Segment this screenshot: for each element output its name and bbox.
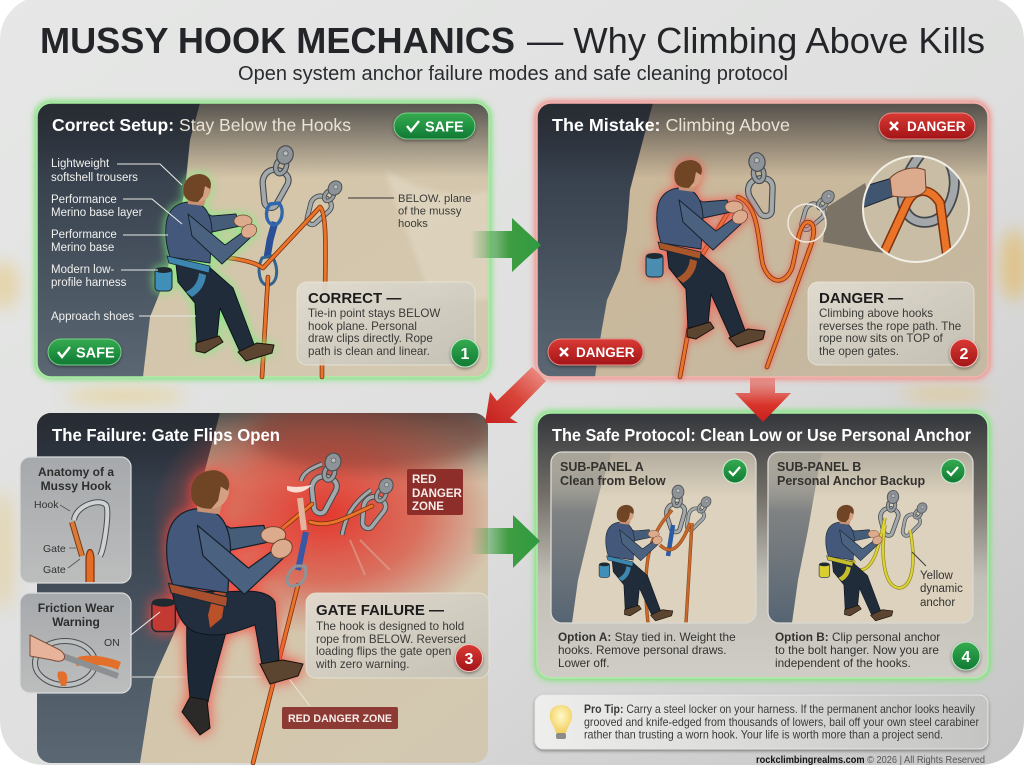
sub-panel b: anchor	[920, 597, 955, 609]
caption: option b: to the bolt hanger. Now you are	[775, 643, 939, 657]
callout: gate failure	[306, 593, 489, 678]
inset: anatomy of a mussy hook: Gate	[43, 564, 66, 576]
sub-panel b: SUB-PANEL B	[777, 460, 861, 474]
gear labels: Approach shoes	[51, 311, 134, 323]
sub-panel a: SUB-PANEL A	[560, 460, 644, 474]
callout: danger: the open gates.	[819, 345, 899, 358]
inset: friction wear warning: ON	[104, 637, 120, 649]
callout: correct: draw clips directly. Rope	[308, 332, 433, 345]
gear labels: Performance	[51, 229, 117, 241]
panel 3: the failure	[20, 395, 500, 763]
arrow: panel 2 to panel 3	[485, 367, 546, 423]
gear labels: softshell trousers	[51, 172, 138, 184]
label: red danger zone bottom: RED DANGER ZONE	[288, 713, 392, 725]
magnifier beam	[823, 183, 883, 253]
title: — Why Climbing Above Kills	[527, 20, 985, 61]
gear labels: Lightweight	[51, 158, 110, 170]
callout: gate failure: rope from BELOW. Reversed	[316, 633, 466, 646]
anchor hooks	[743, 151, 839, 233]
heading: the failure: The Failure: Gate Flips Open	[52, 425, 280, 445]
inset: anatomy of a mussy hook: Anatomy of a	[38, 465, 114, 479]
step number 4	[952, 642, 980, 670]
hook plane label: of the mussy	[398, 206, 462, 218]
badge: safe top: SAFE	[425, 120, 464, 136]
step number 1: 1	[461, 346, 470, 363]
gear labels: Performance	[51, 194, 117, 206]
label: red danger zone top	[407, 469, 463, 515]
subtitle: Open system anchor failure modes and safe cleaning protocol	[238, 63, 788, 85]
climber	[152, 470, 303, 735]
caption: option a: Stay tied in. Weight the	[611, 630, 736, 644]
badge: safe bottom: SAFE	[76, 346, 115, 362]
gear labels	[51, 158, 196, 323]
label: red danger zone top: ZONE	[412, 501, 444, 513]
caption: option b: independent of the hooks.	[775, 656, 911, 670]
label: red danger zone top: RED	[412, 474, 436, 486]
climber	[646, 160, 765, 347]
callout: gate failure: with zero warning.	[315, 658, 409, 671]
arrow: panel 3 to panel 4	[470, 515, 540, 568]
inset: friction wear warning: Warning	[52, 615, 100, 629]
badge: danger top: DANGER	[907, 119, 966, 134]
rope and draw	[253, 498, 372, 763]
badge: safe top	[394, 113, 475, 139]
inset: anatomy of a mussy hook	[20, 457, 131, 583]
gear labels: Merino base	[51, 242, 114, 254]
inset: anatomy of a mussy hook: Hook	[34, 499, 59, 511]
step number 2	[950, 339, 978, 367]
anchor hooks and blue draw	[255, 142, 347, 285]
sub-panel b	[768, 452, 973, 623]
step number 3: 3	[465, 651, 474, 668]
caption: option a: hooks. Remove personal draws.	[558, 643, 727, 657]
sub-panel b: Personal Anchor Backup	[777, 474, 926, 488]
pro tip	[535, 695, 988, 749]
panel 4: the safe protocol	[535, 411, 990, 680]
heading: correct setup: Correct Setup: Stay Below the Hooks	[52, 115, 351, 135]
caption: option a: Option A:	[558, 630, 611, 644]
title	[40, 20, 985, 61]
orange rope	[222, 207, 325, 377]
hook plane label: hooks	[398, 218, 428, 230]
callout: gate failure: GATE FAILURE —	[316, 602, 444, 619]
step number 3	[456, 644, 482, 672]
pro tip: Pro Tip: Carry a steel locker on your harness. If the permanent anchor looks heavily	[584, 703, 975, 716]
hook plane label	[348, 193, 471, 230]
inset: anatomy of a mussy hook: Mussy Hook	[41, 479, 112, 493]
panel 2: the mistake	[535, 101, 990, 379]
arrow: panel 2 to panel 4	[735, 378, 791, 422]
gear labels: Modern low-	[51, 264, 114, 276]
callout: gate failure: loading flips the gate open	[316, 645, 451, 658]
icon: light bulb	[550, 705, 572, 739]
callout: gate failure: The hook is designed to hold	[316, 620, 464, 633]
callout: correct: path is clean and linear.	[308, 345, 430, 358]
callout: correct	[297, 282, 475, 365]
step number 2: 2	[960, 346, 969, 363]
label: red danger zone bottom	[282, 680, 398, 729]
gear labels: Merino base layer	[51, 207, 143, 219]
step number 4: 4	[962, 649, 971, 666]
callout: correct: CORRECT —	[308, 290, 401, 307]
title: MUSSY HOOK MECHANICS	[40, 20, 515, 61]
step number 1	[451, 339, 479, 367]
label: red danger zone top: DANGER	[412, 488, 463, 500]
magnifier inset	[788, 155, 969, 262]
callout: danger: Climbing above hooks	[819, 307, 933, 320]
caption: option a: Lower off.	[558, 656, 610, 670]
sub-panel a: Clean from Below	[560, 474, 666, 488]
sub-panel a	[551, 452, 756, 623]
badge: danger bottom	[548, 339, 643, 365]
callout: danger	[808, 282, 974, 365]
arrow: panel 1 to panel 2	[470, 218, 541, 272]
pro tip: grooved and knife-edged from thousands of lowers, bail off your own steel carabiner	[584, 716, 979, 729]
callout: danger: reverses the rope path. The	[819, 320, 961, 333]
inset: anatomy of a mussy hook: Gate	[43, 543, 66, 555]
inset: friction wear warning	[20, 593, 160, 693]
sub-panel b: Yellow	[920, 570, 954, 582]
climber	[155, 174, 274, 361]
caption: option b: Option B:	[775, 630, 829, 644]
panel 1: correct setup	[35, 101, 491, 379]
badge: danger bottom: DANGER	[576, 345, 635, 360]
callout: danger: rope now sits on TOP of	[819, 332, 944, 345]
gear labels: profile harness	[51, 277, 127, 289]
hook plane label: BELOW. plane	[398, 193, 471, 205]
badge: safe bottom	[48, 339, 121, 365]
callout: correct: hook plane. Personal	[308, 320, 417, 333]
orange rope reversed	[680, 197, 814, 377]
failed hooks	[287, 450, 399, 575]
caption: option b: Clip personal anchor	[829, 630, 940, 644]
badge: danger top	[879, 113, 975, 139]
inset: friction wear warning: Friction Wear	[38, 601, 115, 615]
heading: the mistake: The Mistake: Climbing Above	[552, 115, 790, 135]
sub-panel b: dynamic	[920, 583, 963, 595]
pro tip: rather than trusting a worn hook. Your life is worth more than a project send.	[584, 728, 943, 742]
callout: danger: DANGER —	[819, 290, 903, 307]
callout: correct: Tie-in point stays BELOW	[308, 307, 440, 320]
heading: safe protocol: The Safe Protocol: Clean Low or Use Personal Anchor	[552, 425, 971, 445]
